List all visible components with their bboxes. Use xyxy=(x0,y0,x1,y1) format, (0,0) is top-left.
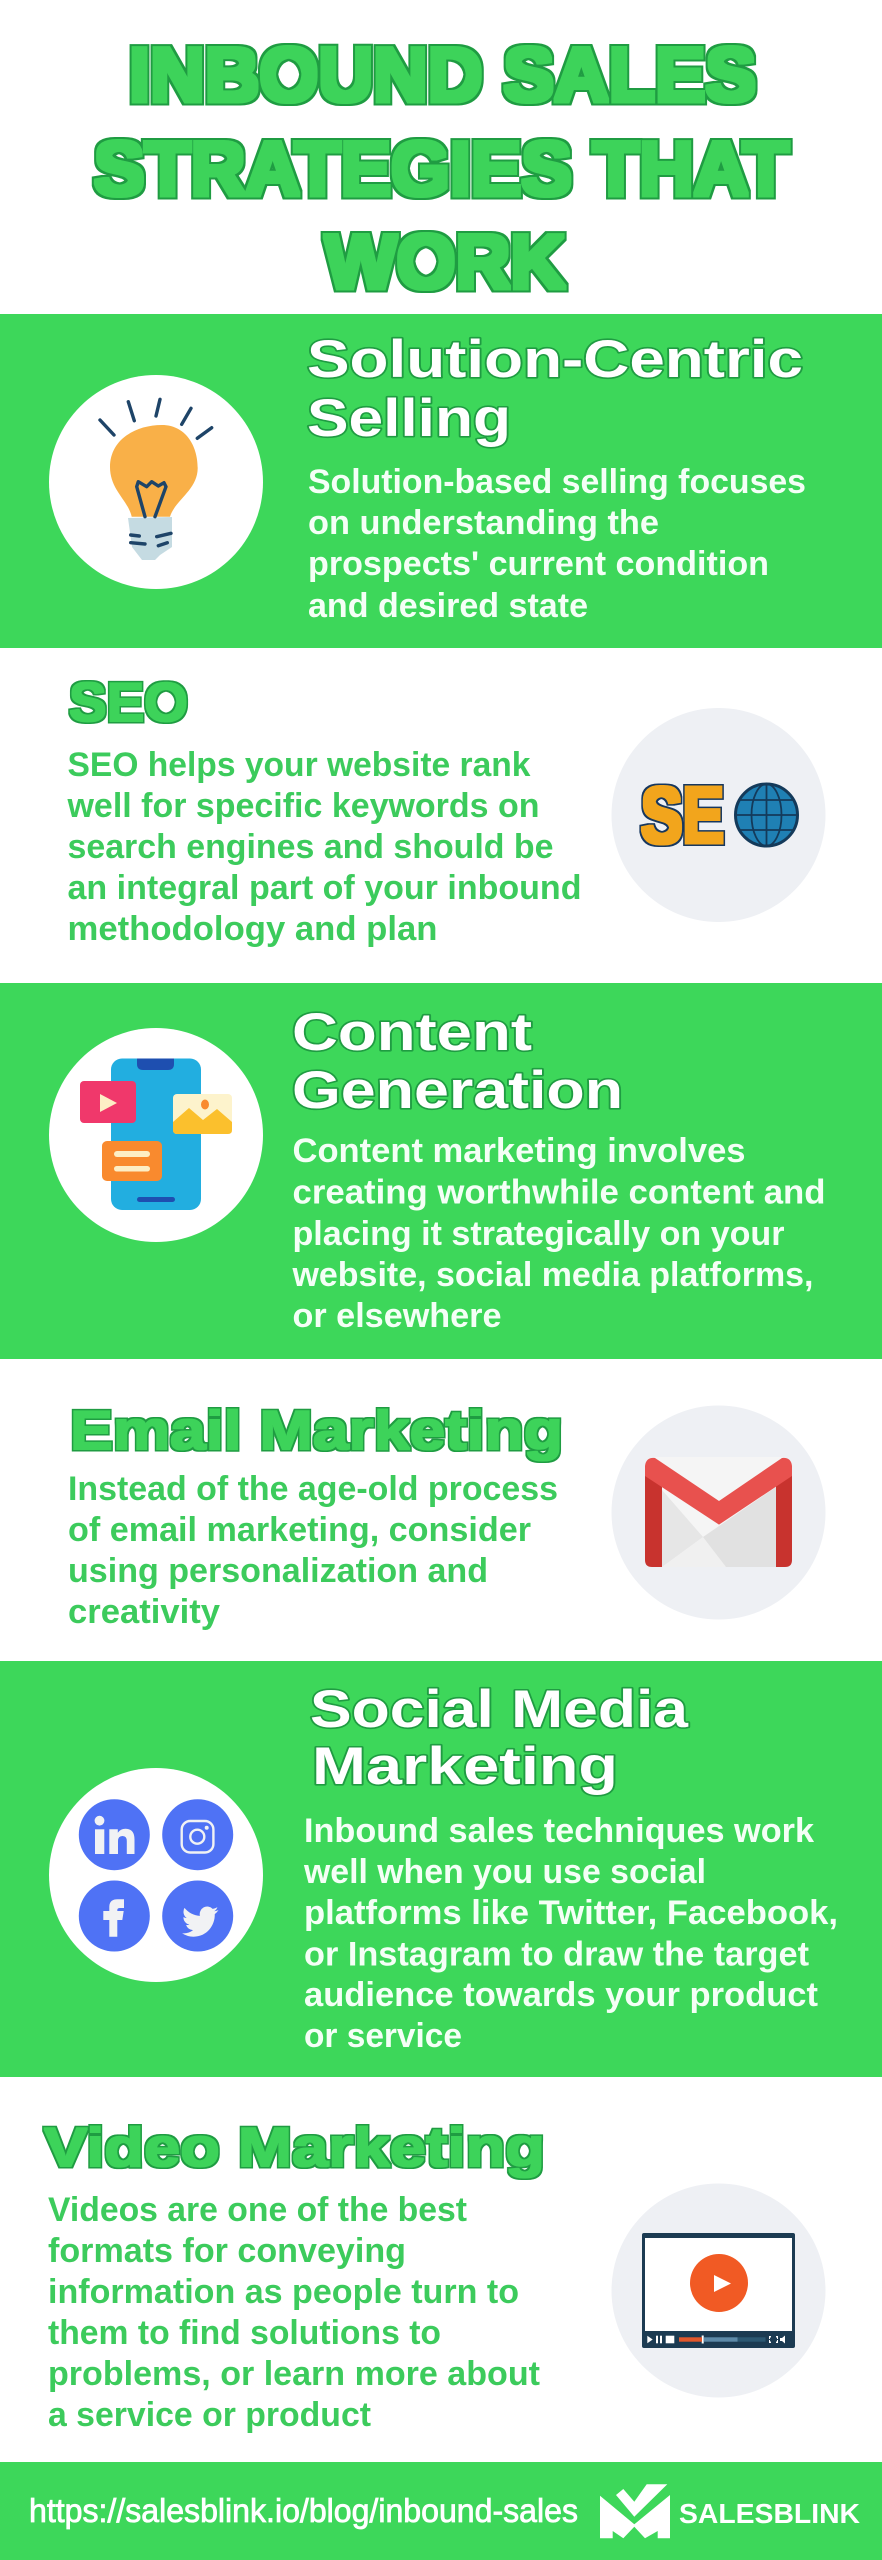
text: content generation description: or elsewhere xyxy=(292,1297,502,1335)
title: INBOUND SALES xyxy=(129,33,756,118)
text: SEO description xyxy=(67,746,582,948)
icon: phone with content cards xyxy=(49,1028,263,1242)
heading: solution-centric selling: Selling xyxy=(307,389,511,448)
text: SEO description: an integral part of your inbound xyxy=(68,869,582,907)
title: WORK xyxy=(325,220,565,305)
panel: content generation xyxy=(0,983,882,1359)
text: email marketing description: Instead of the age-old process xyxy=(68,1470,558,1508)
text: social media description xyxy=(303,1812,838,2055)
text: SEO description: SEO helps your website rank xyxy=(68,746,531,784)
panel: video marketing xyxy=(44,2116,826,2434)
icon: SEO globe xyxy=(612,708,826,922)
text: content generation description: placing it strategically on your xyxy=(292,1215,784,1253)
panel: email marketing xyxy=(68,1399,826,1631)
heading: social media marketing xyxy=(310,1680,689,1796)
text: social media description: or Instagram to draw the target xyxy=(304,1936,809,1974)
text: video marketing description xyxy=(48,2191,540,2434)
heading: solution-centric selling xyxy=(307,330,803,448)
text: source url: https://salesblink.io/blog/inbound-sales xyxy=(29,2492,578,2529)
text: email marketing description: using personalization and xyxy=(68,1552,488,1590)
icon: SEO globe: SE xyxy=(641,770,724,860)
text: video marketing description: information as people turn to xyxy=(48,2273,519,2311)
heading: content generation: Content xyxy=(292,1003,532,1062)
text: solution-centric description: on understanding the xyxy=(308,504,659,542)
heading: content generation: Generation xyxy=(292,1061,623,1120)
icon: light bulb xyxy=(49,375,263,589)
text: salesblink wordmark: SALESBLINK xyxy=(679,2498,860,2529)
text: social media description: platforms like Twitter, Facebook, xyxy=(304,1894,838,1932)
icon: gmail envelope xyxy=(612,1406,826,1620)
text: video marketing description: formats for conveying xyxy=(48,2232,406,2270)
icon: salesblink logo mark xyxy=(600,2484,670,2538)
title: STRATEGIES THAT xyxy=(94,127,789,212)
heading: email marketing: Email Marketing xyxy=(70,1399,563,1461)
text: video marketing description: them to find solutions to xyxy=(48,2314,441,2352)
heading: solution-centric selling: Solution-Centric xyxy=(307,330,803,389)
text: video marketing description: a service or product xyxy=(48,2396,371,2434)
panel: footer xyxy=(0,2462,882,2560)
text: content generation description: creating worthwhile content and xyxy=(292,1174,826,1212)
text: solution-centric description xyxy=(308,463,806,625)
heading: video marketing: Video Marketing xyxy=(44,2116,545,2178)
icon: video player xyxy=(612,2184,826,2398)
text: SEO description: well for specific keywords on xyxy=(67,787,540,825)
text: social media description: well when you use social xyxy=(303,1853,706,1891)
text: content generation description: website, social media platforms, xyxy=(292,1256,814,1294)
heading: social media marketing: Social Media xyxy=(310,1680,689,1739)
text: content generation description: Content marketing involves xyxy=(292,1132,746,1170)
text: email marketing description xyxy=(68,1470,558,1631)
title xyxy=(94,33,789,305)
panel: social media marketing xyxy=(0,1661,882,2077)
text: social media description: audience towards your product xyxy=(304,1976,818,2014)
panel: SEO xyxy=(67,671,826,948)
text: solution-centric description: and desired state xyxy=(308,587,588,625)
text: video marketing description: problems, or learn more about xyxy=(48,2355,540,2393)
text: SEO description: search engines and should be xyxy=(68,828,554,866)
text: social media description: Inbound sales techniques work xyxy=(304,1812,814,1850)
icon: social media badges xyxy=(49,1768,263,1982)
text: SEO description: methodology and plan xyxy=(68,910,438,948)
heading: social media marketing: Marketing xyxy=(312,1737,618,1796)
text: solution-centric description: Solution-based selling focuses xyxy=(308,463,806,501)
text: email marketing description: of email marketing, consider xyxy=(68,1511,531,1549)
text: video marketing description: Videos are one of the best xyxy=(48,2191,467,2229)
text: content generation description xyxy=(292,1132,826,1335)
text: solution-centric description: prospects' current condition xyxy=(308,545,769,583)
text: social media description: or service xyxy=(304,2017,462,2055)
text: email marketing description: creativity xyxy=(68,1593,220,1631)
panel: solution-centric selling xyxy=(0,314,882,648)
heading: SEO: SEO xyxy=(69,671,188,733)
heading: content generation xyxy=(292,1003,623,1120)
